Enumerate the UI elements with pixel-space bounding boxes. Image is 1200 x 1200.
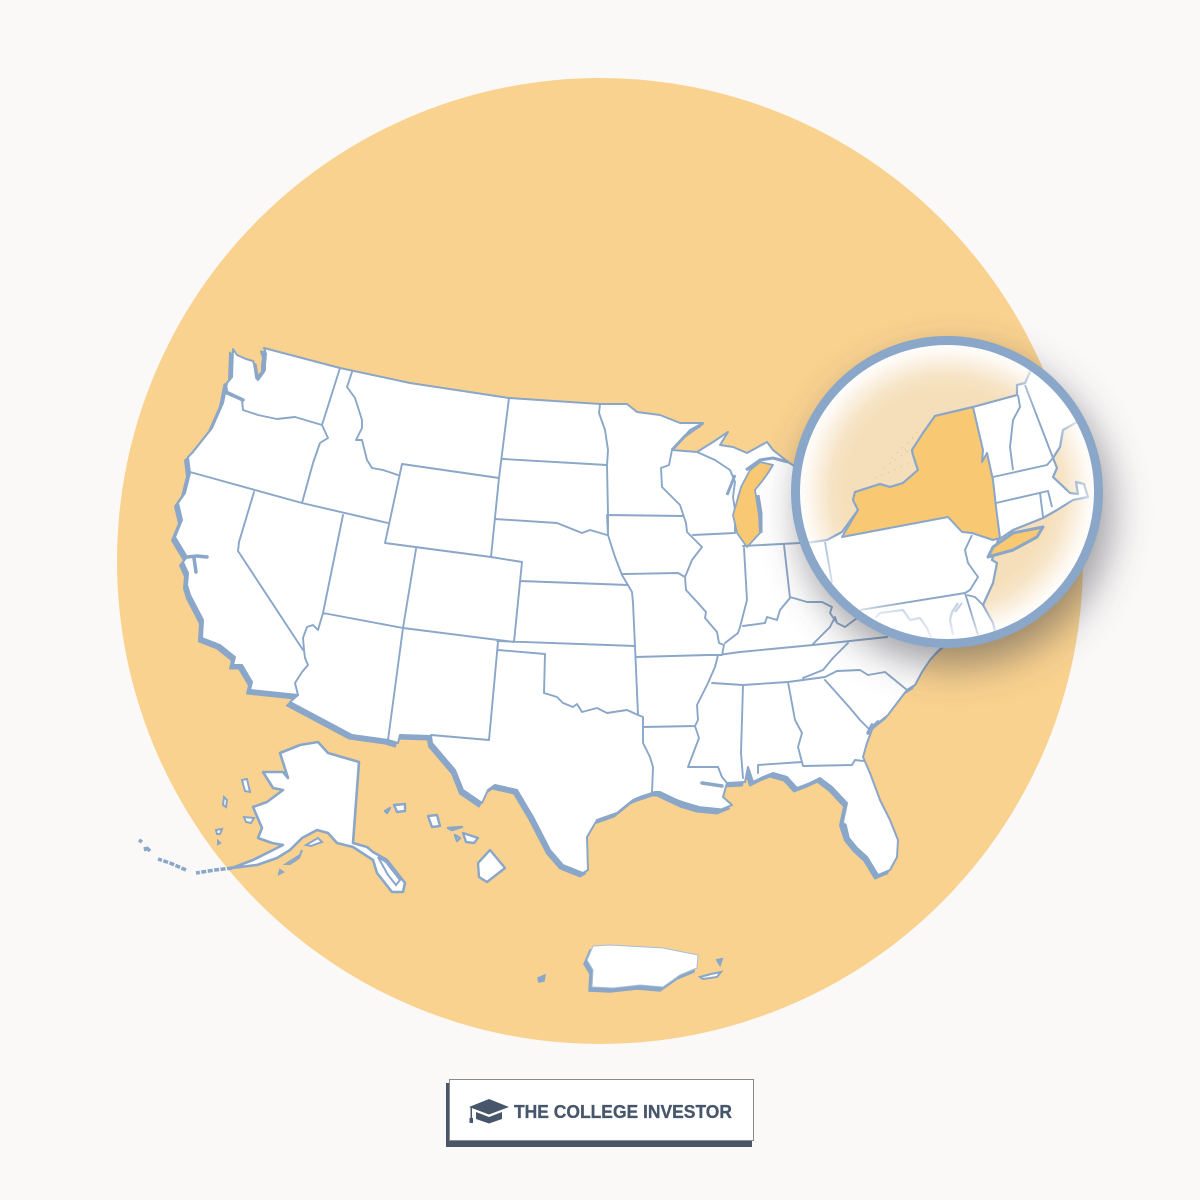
- small islands: [700, 972, 721, 979]
- alaska islands: [216, 779, 400, 885]
- neighbouring borders: [825, 385, 1053, 635]
- yellow background circle: [117, 78, 1083, 1044]
- state borders: [190, 368, 907, 793]
- lens edge fade: [799, 344, 1095, 640]
- bay and river squiggles: [875, 603, 962, 640]
- lens ring: [796, 340, 1098, 644]
- aleutian islands: [139, 840, 232, 873]
- coast and bay details: [187, 358, 878, 860]
- map: contiguous United States: [172, 348, 960, 878]
- map: Alaska: [139, 742, 405, 892]
- map: Hawaii: [385, 804, 505, 882]
- logo text: THE COLLEGE INVESTOR: [514, 1102, 732, 1122]
- icon: graduation cap: [469, 1099, 509, 1124]
- logo badge: [446, 1080, 754, 1147]
- magnifier lens: New York detail: [791, 336, 1103, 648]
- neighbouring land: [808, 370, 1089, 636]
- map: Puerto Rico: [538, 945, 722, 992]
- magnifier shadow: [799, 354, 1111, 666]
- badge shadow: [446, 1083, 752, 1147]
- state: New York: [842, 407, 1000, 540]
- lens background: [799, 344, 1095, 640]
- state: New York, Long Island: [988, 527, 1043, 557]
- badge box: [450, 1080, 754, 1140]
- lake michigan: [672, 423, 788, 547]
- lake ontario dots: [875, 428, 920, 478]
